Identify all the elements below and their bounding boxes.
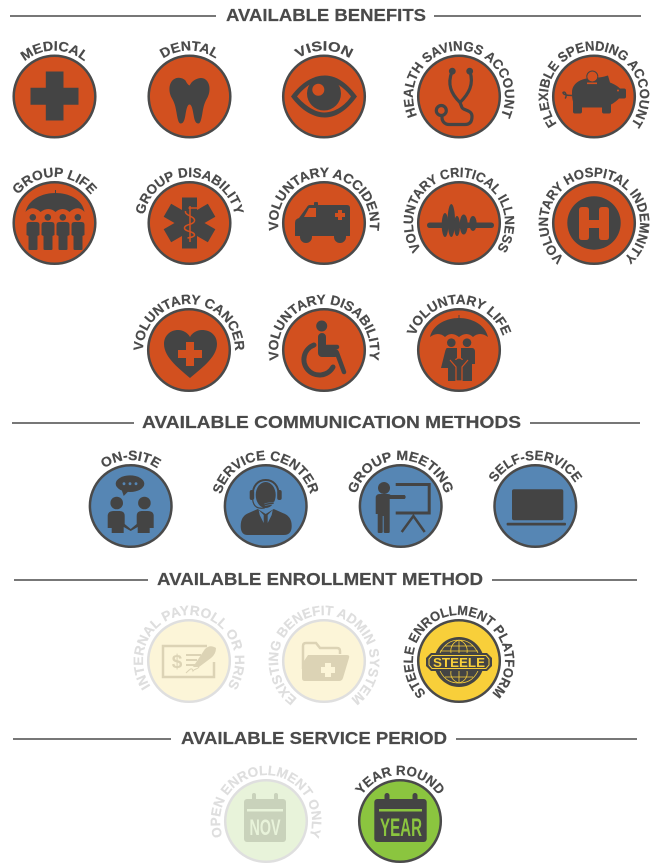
icon: two people talking: [108, 475, 154, 533]
heading: available benefits: AVAILABLE BENEFITS: [226, 5, 426, 25]
icon: umbrella over family: [430, 315, 488, 381]
badge: voluntary hospital indemnity: [538, 168, 650, 265]
icon: headset agent: [241, 480, 292, 535]
badge: voluntary disability: [268, 294, 380, 392]
label: dental: DENTAL: [159, 41, 216, 58]
label: internal payroll or hris: INTERNAL PAYROLL OR HRIS: [134, 606, 244, 690]
label: group life: GROUP LIFE: [13, 168, 98, 194]
icon: ambulance: [295, 202, 350, 243]
badge: voluntary life: [406, 294, 512, 392]
panel: available benefits: [10, 5, 650, 392]
label: steele enrollment platform: STEELE ENROLLMENT PLATFORM: [404, 606, 514, 699]
badge: group life: [12, 168, 98, 265]
panel: available service period: [13, 728, 637, 863]
label: voluntary critical illness: VOLUNTARY CRITICAL ILLNESS: [403, 168, 514, 254]
icon: eye: [291, 76, 357, 118]
badge: vision: [282, 41, 366, 138]
label: self-service: SELF-SERVICE: [489, 450, 582, 482]
icon: folder with cross: [302, 643, 349, 681]
badge: internal payroll or hris (faded): [134, 606, 244, 703]
icon: check and pen: $: [172, 652, 183, 673]
label: voluntary hospital indemnity: VOLUNTARY HOSPITAL INDEMNITY: [538, 168, 650, 265]
icon: calendar nov: NOV: [250, 815, 281, 840]
label: group disability: GROUP DISABILITY: [136, 168, 244, 214]
badge: group disability: [136, 168, 244, 265]
heading: available enrollment method: AVAILABLE ENROLLMENT METHOD: [157, 569, 483, 589]
badge: existing benefit admin system (faded): [268, 606, 380, 706]
icon: hospital H: [567, 196, 621, 250]
icon: laptop: [507, 489, 566, 526]
heading: available communication methods: AVAILABLE COMMUNICATION METHODS: [142, 412, 521, 432]
label: vision: VISION: [294, 41, 354, 58]
icon: presenter and board: [376, 482, 431, 533]
label: flexible spending account: FLEXIBLE SPENDING ACCOUNT: [538, 41, 650, 129]
label: voluntary disability: VOLUNTARY DISABILITY: [268, 294, 380, 361]
badge: on-site: [88, 450, 173, 548]
badge: medical: [12, 41, 97, 138]
icon: tooth: [169, 78, 210, 124]
label: service center: SERVICE CENTER: [213, 450, 318, 494]
panel: available enrollment method: [14, 529, 637, 706]
badge: voluntary accident: [268, 168, 380, 265]
badge: group meeting: [348, 450, 453, 548]
icon: calendar year: YEAR: [380, 814, 422, 842]
badge: flexible spending account: [538, 41, 650, 138]
icon: umbrella over four people: [26, 190, 84, 250]
badge: steele enrollment platform: [404, 606, 514, 703]
icon: stethoscope: [436, 69, 472, 124]
icon: piggy bank: [563, 71, 626, 114]
heading: available service period: AVAILABLE SERVICE PERIOD: [181, 728, 447, 748]
label: existing benefit admin system: EXISTING BENEFIT ADMIN SYSTEM: [268, 606, 380, 706]
label: voluntary cancer: VOLUNTARY CANCER: [133, 294, 244, 351]
label: health savings account: HEALTH SAVINGS ACCOUNT: [404, 41, 514, 119]
panel: available communication methods: [12, 382, 640, 548]
badge: self-service: [489, 450, 582, 548]
badge: voluntary cancer: [133, 294, 244, 392]
badge: service center: [213, 450, 318, 548]
label: voluntary life: VOLUNTARY LIFE: [406, 294, 512, 336]
icon: medical cross: [30, 72, 78, 120]
label: on-site: ON-SITE: [101, 450, 162, 468]
badge: open enrollment only (faded): [210, 766, 322, 863]
label: voluntary accident: VOLUNTARY ACCIDENT: [268, 168, 380, 231]
label: year round: YEAR ROUND: [354, 766, 444, 794]
icon: wheelchair: [304, 320, 344, 375]
badge: dental: [147, 41, 232, 138]
badge: voluntary critical illness: [403, 168, 514, 265]
icon: waveform: [427, 204, 494, 237]
badge: year round: [354, 766, 444, 863]
icon: steele globe logo: STEELE: [433, 655, 485, 670]
label: open enrollment only: OPEN ENROLLMENT ONLY: [210, 766, 322, 839]
label: group meeting: GROUP MEETING: [348, 450, 453, 492]
label: medical: MEDICAL: [20, 41, 86, 62]
icon: star of life: [164, 198, 215, 248]
badge: health savings account: [404, 41, 514, 138]
icon: heart with cross: [164, 330, 217, 378]
